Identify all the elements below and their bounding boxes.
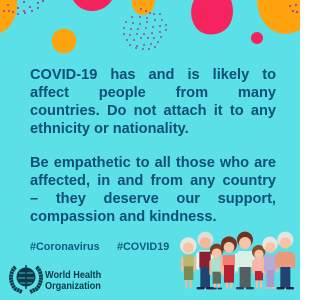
text block: first paragraph: ethnicity or nationality. xyxy=(30,121,189,137)
text block: second paragraph: affected, in and from any country xyxy=(30,173,276,189)
person: woman in red skirt xyxy=(220,236,238,289)
icon: WHO emblem xyxy=(11,265,41,292)
person: man in pale shirt xyxy=(235,232,255,289)
person: boy xyxy=(209,244,224,289)
text block: first paragraph: countries. Do not attach it to any xyxy=(30,103,276,119)
text block: second paragraph: – they deserve our support, xyxy=(30,191,276,207)
text block: second paragraph: compassion and kindness. xyxy=(30,209,217,225)
person: grandfather right xyxy=(275,232,295,289)
logo text: World Health Organization xyxy=(45,269,101,292)
hashtag: Coronavirus: #Coronavirus xyxy=(30,241,100,253)
text block: first paragraph: COVID-19 has and is likely to xyxy=(30,67,276,83)
logo text: World Health Organization: World Health xyxy=(45,269,101,281)
logo text: World Health Organization: Organization xyxy=(45,280,101,292)
hashtag: COVID19: #COVID19 xyxy=(117,241,169,253)
decorative shapes: top blobs and dots xyxy=(0,0,300,53)
person: grandmother right xyxy=(262,237,278,289)
text block: second paragraph xyxy=(30,155,276,225)
text block: second paragraph: Be empathetic to all those who are xyxy=(30,155,276,171)
illustration: family of eight people xyxy=(180,232,295,289)
person: grandmother left xyxy=(180,237,197,288)
text block: first paragraph xyxy=(30,67,276,137)
person: girl xyxy=(252,245,266,288)
text block: first paragraph: affect people from many xyxy=(30,85,276,101)
person: grandfather with vest xyxy=(196,232,214,289)
